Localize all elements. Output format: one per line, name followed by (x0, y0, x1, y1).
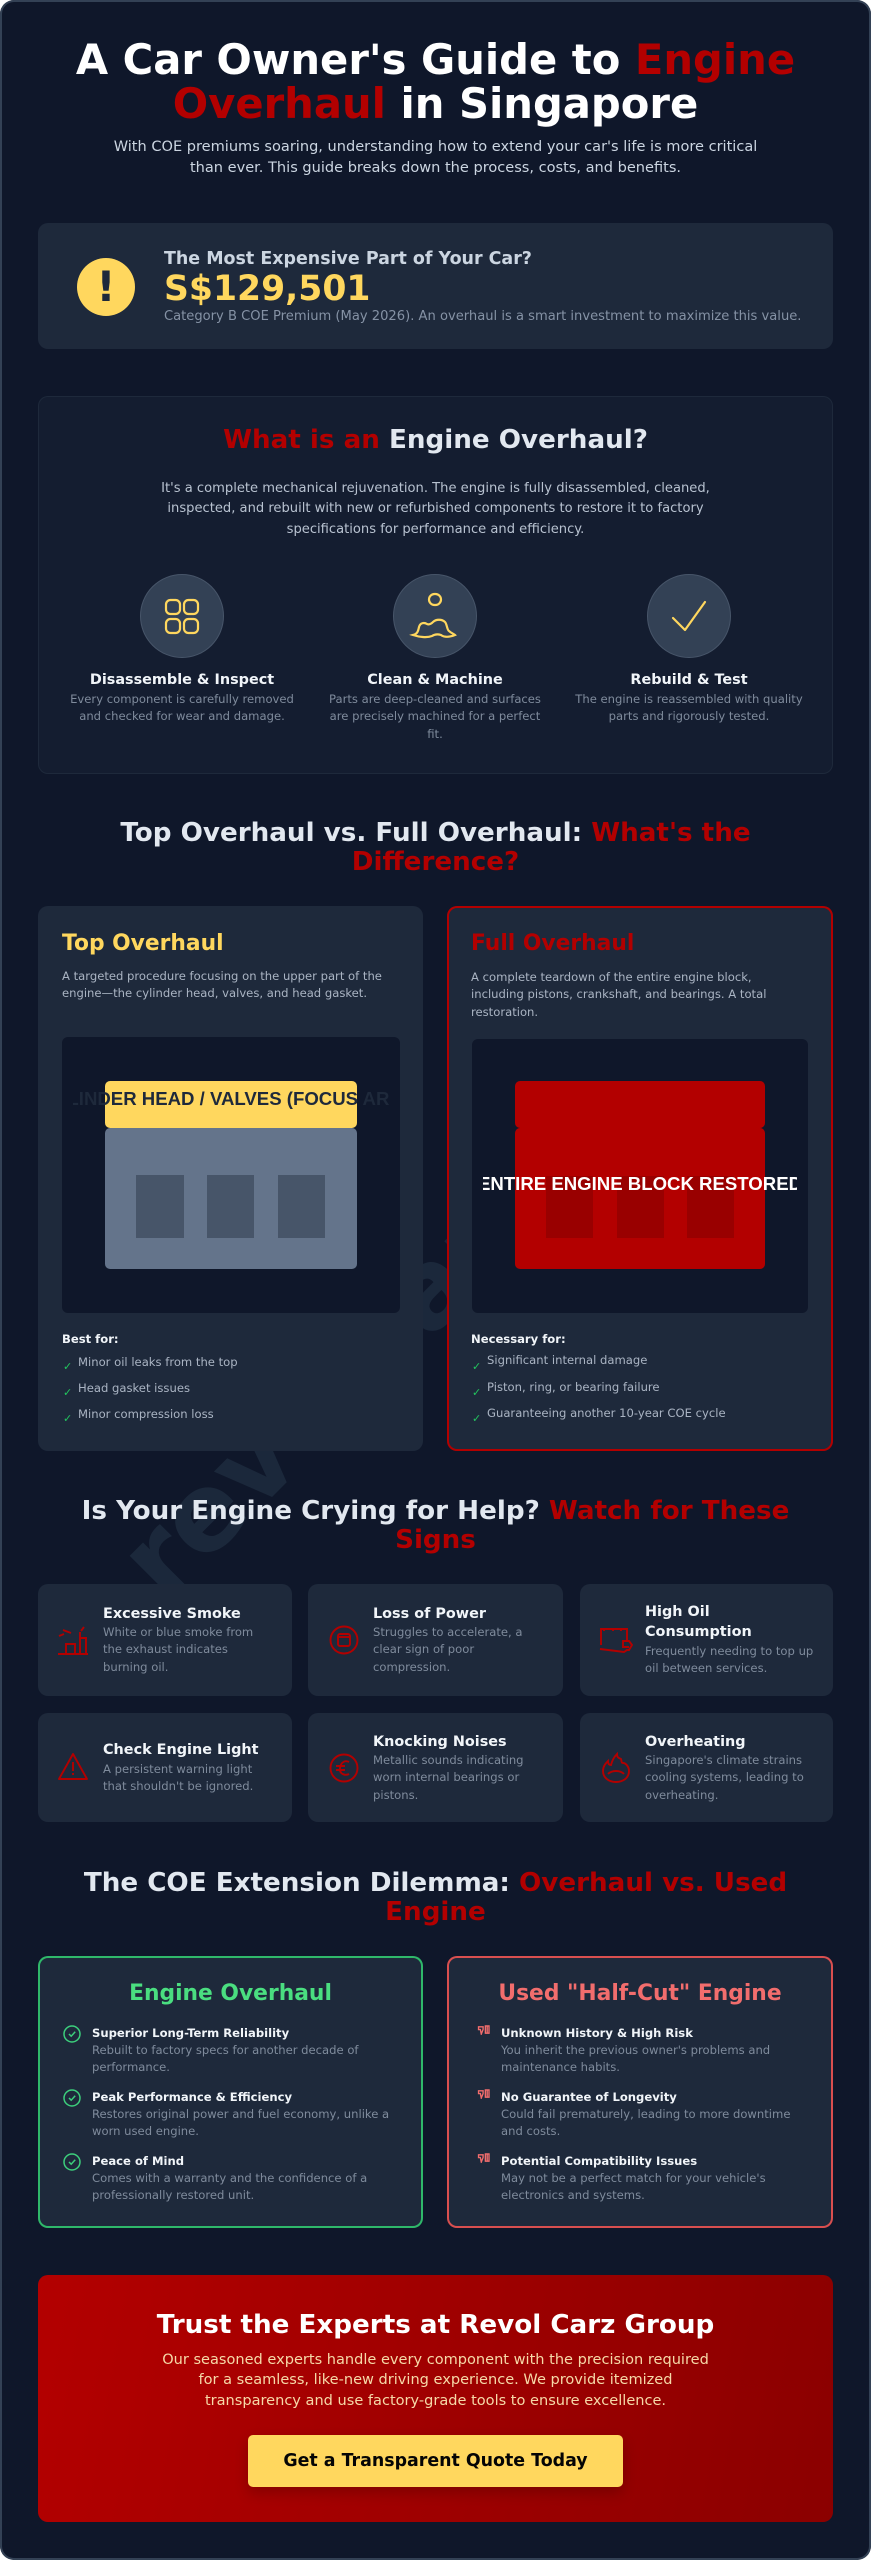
sign title: Overheating (645, 1734, 746, 1750)
sign text: clear sign of poor (373, 1642, 474, 1656)
sign text: White or blue smoke from (103, 1625, 253, 1639)
sign text (645, 1644, 813, 1675)
icon: warning circle: ! (96, 262, 116, 311)
list item: Head gasket issues (78, 1381, 190, 1395)
sign title: Consumption (645, 1624, 752, 1640)
panel: loss of power (308, 1584, 563, 1696)
heading: warning signs: Signs (395, 1525, 476, 1555)
item text: electronics and systems. (501, 2188, 645, 2202)
description: inspected, and rebuilt with new or refurbished components to restore it to factory (167, 501, 704, 516)
watermark: revolcarz.com (95, 931, 787, 1622)
heading: COE dilemma: Engine (385, 1897, 486, 1927)
item text: Could fail prematurely, leading to more downtime (501, 2107, 790, 2121)
panel: high oil consumption (580, 1584, 833, 1696)
item text: You inherit the previous owner's problems and (501, 2043, 770, 2057)
step text: The engine is reassembled with quality (575, 692, 803, 706)
engine block (105, 1081, 357, 1269)
step text (70, 692, 294, 723)
sign text: that shouldn't be ignored. (103, 1779, 253, 1793)
item text (501, 2106, 790, 2141)
card title: Used "Half-Cut" Engine (498, 1981, 782, 2006)
item text: and costs. (501, 2124, 560, 2138)
heading: COE dilemma: The COE Extension Dilemma: Overhaul vs. Used (84, 1868, 787, 1898)
item title: Potential Compatibility Issues (501, 2154, 697, 2168)
card text (62, 969, 382, 1000)
icon: flame (602, 1752, 630, 1783)
CTA heading: Trust the Experts at Revol Carz Group (157, 2310, 714, 2340)
heading: COE dilemma (84, 1868, 787, 1927)
card text (471, 970, 766, 1019)
step text (575, 692, 803, 723)
benefit: performance (62, 2086, 402, 2140)
step title: Disassemble & Inspect (90, 672, 274, 688)
step text: Parts are deep-cleaned and surfaces (329, 692, 541, 706)
sign text (103, 1625, 253, 1674)
diagram: cylinder head focus (62, 1037, 400, 1313)
title (76, 35, 795, 128)
heading: warning signs (82, 1496, 789, 1555)
item text (92, 2170, 367, 2205)
icon: smoke (58, 1626, 88, 1655)
sign text: pistons. (373, 1788, 418, 1802)
icon: gauge (330, 1626, 358, 1654)
subtitle: With COE premiums soaring, understanding how to extend your car's life is more critical (114, 138, 757, 155)
benefit: peace of mind (62, 2150, 402, 2204)
icon: check circle (63, 2025, 81, 2043)
step: clean and machine (329, 574, 541, 741)
check: ✓ (472, 1412, 481, 1425)
card text: A complete teardown of the entire engine block, (471, 970, 752, 984)
subtitle (114, 138, 757, 176)
sign title: High Oil (645, 1604, 710, 1620)
icon: check circle (62, 2152, 82, 2172)
panel: full overhaul (447, 906, 833, 1451)
title: A Car Owner's Guide to Engine (76, 35, 795, 84)
item text (92, 2043, 359, 2074)
CTA button: Get a Transparent Quote Today (283, 2451, 588, 2471)
risk: compatibility (477, 2150, 817, 2204)
benefit: reliability (63, 2025, 359, 2074)
item text: Rebuilt to factory specs for another decade of (92, 2043, 358, 2057)
title: Overhaul in Singapore (173, 79, 698, 128)
sign text: Struggles to accelerate, a (373, 1625, 523, 1639)
panel: excessive smoke (38, 1584, 292, 1696)
list heading: Best for: (62, 1332, 119, 1346)
item text: maintenance habits. (501, 2060, 620, 2074)
panel: top overhaul (38, 906, 423, 1451)
sign text: Frequently needing to top up (645, 1644, 813, 1658)
sign text (373, 1625, 523, 1674)
sign text: the exhaust indicates (103, 1642, 228, 1656)
list heading: Necessary for: (471, 1332, 566, 1346)
CTA text: Our seasoned experts handle every component with the precision required (162, 2351, 709, 2368)
diagram: entire engine block (472, 1039, 808, 1313)
icon: check mark (647, 574, 731, 658)
callout number: S$129,501 (164, 269, 370, 309)
sign text: oil between services. (645, 1661, 767, 1675)
description (161, 481, 710, 537)
item title: No Guarantee of Longevity (501, 2090, 677, 2104)
description: It's a complete mechanical rejuvenation. The engine is fully disassembled, cleaned, (161, 481, 710, 496)
item text: Restores original power and fuel economy, unlike a (92, 2107, 389, 2121)
icon: warning circle (77, 258, 135, 316)
step text: fit. (427, 727, 443, 741)
check: ✓ (63, 1386, 72, 1399)
item title: Unknown History & High Risk (501, 2026, 693, 2040)
item title: Superior Long-Term Reliability (92, 2026, 289, 2040)
step title: Clean & Machine (367, 672, 503, 688)
list item: Significant internal damage (487, 1353, 647, 1367)
risk: unknown history (477, 2022, 817, 2076)
sign title: Check Engine Light (103, 1742, 259, 1758)
item text (501, 2170, 766, 2205)
sign text: overheating. (645, 1788, 718, 1802)
list: necessary for (472, 1353, 726, 1425)
card title: Top Overhaul (62, 931, 224, 956)
step text (329, 692, 541, 741)
step text: Every component is carefully removed (70, 692, 294, 706)
check: ✓ (472, 1360, 481, 1373)
item text: performance. (92, 2060, 170, 2074)
item text: Comes with a warranty and the confidence of a (92, 2171, 367, 2185)
check: ✓ (63, 1360, 72, 1373)
card text: engine—the cylinder head, valves, and head gasket. (62, 986, 367, 1000)
step text: are precisely machined for a perfect (330, 709, 540, 723)
card text: restoration. (471, 1005, 538, 1019)
panel: check engine light (38, 1713, 292, 1822)
sign text: worn internal bearings or (373, 1770, 519, 1784)
item text (92, 2106, 389, 2141)
panel: COE premium callout (38, 223, 833, 349)
icon: knock coin (330, 1754, 358, 1782)
sign title: Loss of Power (373, 1606, 486, 1622)
sign text: Metallic sounds indicating (373, 1753, 524, 1767)
heading: What is an Engine Overhaul? (223, 425, 648, 455)
panel: used half-cut engine risks (447, 1956, 833, 2228)
icon: parts grid (140, 574, 224, 658)
card title: Full Overhaul (471, 931, 634, 956)
list item: Minor oil leaks from the top (78, 1355, 238, 1369)
icon: thumbs down (477, 2153, 491, 2163)
panel: engine overhaul benefits (38, 1956, 423, 2228)
CTA text (38, 2350, 833, 2411)
step text: parts and rigorously tested. (609, 709, 769, 723)
sign text: compression. (373, 1660, 450, 1674)
sign text: burning oil. (103, 1660, 168, 1674)
icon: check circle (62, 2088, 82, 2108)
item title: Peace of Mind (92, 2154, 184, 2168)
heading: warning signs: Is Your Engine Crying for Help? Watch for These (82, 1496, 789, 1526)
icon: warning triangle (58, 1753, 88, 1780)
icon: cleaning (393, 574, 477, 658)
item title: Peak Performance & Efficiency (92, 2090, 292, 2104)
list item: Minor compression loss (78, 1407, 214, 1421)
list item: Guaranteeing another 10-year COE cycle (487, 1406, 726, 1420)
panel: overheating (580, 1713, 833, 1822)
sign text: Singapore's climate strains (645, 1753, 802, 1767)
CTA text: for a seamless, like-new driving experience. We provide itemized (198, 2371, 672, 2388)
description: specifications for performance and efficiency. (287, 522, 584, 537)
sign title: Excessive Smoke (103, 1606, 241, 1622)
subtitle: than ever. This guide breaks down the process, costs, and benefits. (190, 159, 681, 176)
callout note: Category B COE Premium (May 2026). An overhaul is a smart investment to maximize this value. (164, 309, 801, 324)
icon: thumbs down (477, 2025, 491, 2035)
step title: Rebuild & Test (630, 672, 748, 688)
item text (501, 2042, 770, 2077)
sign text: cooling systems, leading to (645, 1770, 804, 1784)
check: ✓ (472, 1386, 481, 1399)
sign text (373, 1753, 524, 1802)
heading: top vs full (120, 818, 751, 877)
panel: call to action (38, 2275, 833, 2522)
step: rebuild and test (575, 574, 803, 723)
list item: Piston, ring, or bearing failure (487, 1380, 660, 1394)
step: disassemble and inspect (70, 574, 294, 723)
risk: longevity (477, 2086, 817, 2140)
card text: including pistons, crankshaft, and bearings. A total (471, 987, 766, 1001)
sign title: Knocking Noises (373, 1734, 507, 1750)
card text: A targeted procedure focusing on the upper part of the (62, 969, 382, 983)
callout heading: The Most Expensive Part of Your Car? (164, 249, 532, 269)
item text: worn used engine. (92, 2124, 199, 2138)
heading: top vs full: Difference? (352, 847, 519, 877)
engine block (515, 1081, 765, 1269)
sign text (103, 1762, 253, 1793)
sign title (645, 1604, 752, 1640)
CTA text: transparency and use factory-grade tools to ensure excellence. (205, 2392, 666, 2409)
icon: oil (600, 1628, 633, 1653)
icon: thumbs down (477, 2089, 491, 2099)
CTA button (248, 2435, 623, 2487)
panel: what is an engine overhaul (38, 396, 833, 774)
item text: May not be a perfect match for your vehicle's (501, 2171, 766, 2185)
step text: and checked for wear and damage. (79, 709, 285, 723)
panel: knocking noises (308, 1713, 563, 1822)
sign text (645, 1753, 804, 1802)
check: ✓ (63, 1412, 72, 1425)
item text: professionally restored unit. (92, 2188, 254, 2202)
card title: Engine Overhaul (129, 1981, 332, 2006)
list: best for (63, 1355, 238, 1425)
sign text: A persistent warning light (103, 1762, 252, 1776)
heading: top vs full: Top Overhaul vs. Full Overhaul: What's the (120, 818, 751, 848)
